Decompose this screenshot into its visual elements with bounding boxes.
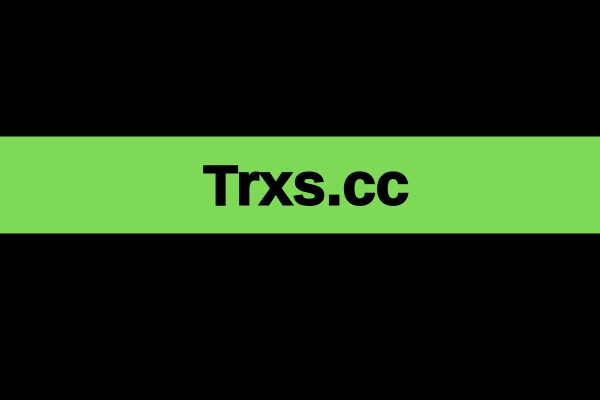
title: T: [204, 153, 238, 216]
green band: [0, 136, 600, 234]
title: rxs.cc: [236, 151, 409, 217]
